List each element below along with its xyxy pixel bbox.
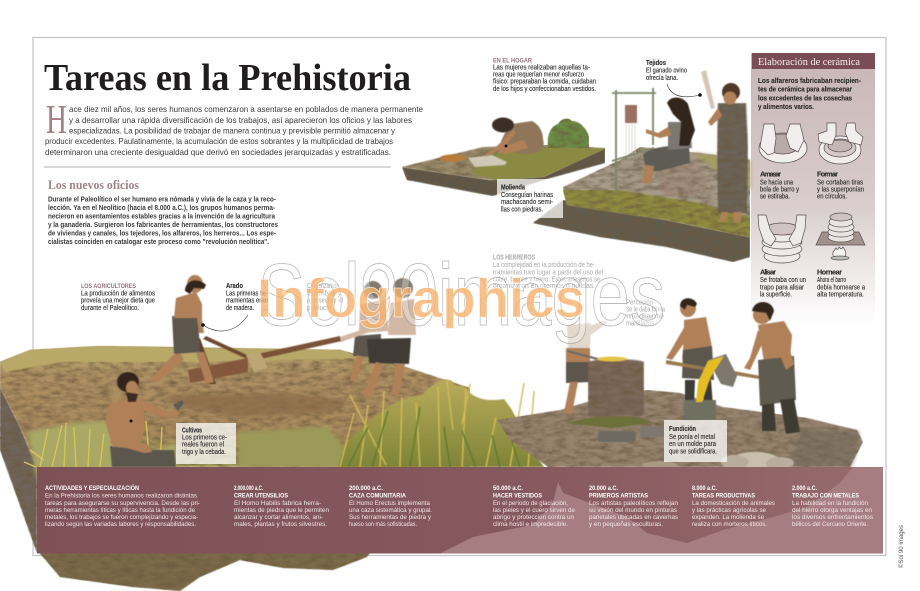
loom	[612, 88, 656, 193]
smith with tongs	[744, 302, 800, 434]
timeline column: tareas productivas: expanden. La molienda se	[692, 514, 764, 521]
step: alisar: Alisar	[760, 268, 776, 276]
watermark: infographics: Infographics	[257, 267, 585, 329]
callout: tejidos	[646, 58, 687, 82]
illustration: plowman and plow	[150, 275, 342, 384]
timeline column: tareas productivas: y las prácticas agrícolas se	[692, 507, 766, 514]
callout: cultivos: reales fueron el	[182, 440, 224, 448]
heading: los nuevos oficios: Los nuevos oficios	[48, 177, 139, 192]
intro paragraph: producir excedentes. Paulatinamente, la acumulación de estos sobrantes y la multiplicidad de trabajos	[45, 136, 393, 146]
step: hornear: Hornear	[817, 268, 842, 276]
callout: en el hogar: Las mujeres realizaban aquellas ta-	[493, 62, 591, 72]
timeline column: tareas productivas: La domesticación de animales	[692, 500, 776, 507]
horizon grass	[0, 346, 365, 372]
step: amasar	[760, 170, 799, 200]
timeline column: caza comunitaria	[349, 485, 432, 528]
step: alisar	[760, 268, 806, 298]
callout: arado: Las primeras he-	[226, 288, 268, 298]
callout: en el hogar	[493, 58, 596, 93]
callout: comercio faded: producto.	[307, 303, 333, 312]
drop cap: H	[46, 96, 67, 142]
timeline column: primeros artistas: y en pequeñas esculturas.	[589, 521, 663, 528]
callout: percusion faded	[626, 298, 665, 328]
flat stones	[598, 427, 664, 442]
timeline column: caza comunitaria: Sus herramientas de piedra y	[349, 514, 432, 521]
rock side	[0, 387, 37, 553]
step: amasar: bola de barro y	[760, 184, 799, 194]
callout: percusion faded: Se le daba forma	[626, 304, 665, 314]
wheat foreground	[338, 380, 544, 467]
callout: los agricultores: La producción de alimentos	[81, 288, 155, 298]
timeline column: trabajo con metales: 2.000 a.C.	[792, 485, 817, 492]
callout: tejidos: ofrecía lana.	[646, 73, 678, 82]
timeline column: hacer vestidos: En el período de glaciación,	[493, 500, 568, 507]
timeline column: primeros artistas	[589, 485, 679, 528]
soft white wash over blacksmith text zone	[490, 245, 610, 320]
weaver	[642, 97, 707, 196]
timeline column: crear utensilios: males, plantas y frutos silvestres.	[234, 521, 327, 528]
illustration: land	[0, 346, 863, 591]
icon: alisar	[758, 215, 806, 263]
step: hornear	[817, 268, 865, 298]
callout: fundicion: Fundición	[669, 424, 696, 433]
callout: en el hogar: EN EL HOGAR	[493, 58, 532, 64]
timeline column: actividades	[45, 483, 200, 528]
callout: cultivos: Los primeros ce-	[182, 432, 228, 442]
woman grinding	[484, 118, 544, 156]
step: amasar: Se hacía una	[760, 178, 793, 186]
timeline column: hacer vestidos: las pieles y el cuero sirven de	[493, 507, 575, 514]
step: formar: en círculos.	[817, 192, 847, 200]
callout: comercio faded: Comenzamos	[307, 281, 339, 290]
callout: los agricultores: LOS AGRICULTORES	[81, 283, 136, 290]
timeline column: tareas productivas: 8.000 a.C.	[692, 485, 717, 492]
timeline column: trabajo con metales: TRABAJO CON METALES	[792, 492, 859, 500]
callout: fundicion: que se solidificara.	[669, 446, 717, 456]
timeline column: crear utensilios: alcanzar y cortar alimentos, ani-	[234, 514, 323, 521]
right ground	[497, 390, 863, 467]
callout: los herreros: LOS HERREROS	[493, 252, 535, 262]
icon: amasar	[759, 124, 807, 163]
intro paragraph	[45, 96, 423, 157]
olive patch	[238, 426, 358, 467]
arrow: tejidos leader	[667, 84, 702, 97]
timeline column: crear utensilios	[234, 485, 329, 528]
standing woman with distaff	[701, 70, 748, 223]
timeline column: hacer vestidos	[493, 485, 575, 528]
timeline column: trabajo con metales: bélicos del Cercano Oriente.	[792, 521, 868, 528]
timeline column: tareas productivas	[692, 485, 776, 528]
crucible and molten metal	[666, 354, 772, 402]
callout: los herreros: organizaron en gremios o guildas.	[493, 281, 595, 290]
island rock and top surface	[402, 148, 605, 196]
watermark: sol90images: Sol90images	[258, 245, 665, 344]
callout: los agricultores	[81, 283, 155, 312]
ceramica intro: tes de cerámica para almacenar	[758, 84, 852, 94]
timeline column: primeros artistas: su visión del mundo en pinturas	[589, 507, 678, 514]
intro paragraph: determinaron una creciente desigualdad que derivó en sociedades jerarquizadas y estratificadas.	[45, 147, 391, 157]
illustration: tejidos island	[533, 70, 750, 262]
icon: hornear	[816, 213, 865, 260]
timeline column: caza comunitaria: una caza sistemática y grupal.	[349, 507, 432, 514]
timeline column: actividades: tareas para asegurarse su supervivencia. Desde las pri-	[45, 500, 200, 507]
timeline column: primeros artistas: PRIMEROS ARTISTAS	[589, 492, 648, 500]
field terrain	[0, 346, 470, 467]
band: timeline	[37, 467, 883, 554]
callout: percusion faded: Percusión	[626, 298, 653, 306]
callout: comercio faded	[307, 281, 343, 312]
callout: los agricultores: proveía una mejor dieta que	[81, 296, 155, 304]
timeline column: caza comunitaria: El Homo Erectus implementa	[349, 500, 430, 507]
title: Tareas en la Prehistoria	[44, 57, 411, 99]
text block: los nuevos oficios: de viviendas y canales, los tejedores, los alfareros, los herreros... Los espe-	[48, 228, 276, 237]
callout: comercio faded: a sembrar y	[307, 288, 341, 298]
text block: los nuevos oficios: y la ganadería. Surgieron los fabricantes de herramientas, los constructores	[48, 220, 278, 229]
timeline column: crear utensilios: CREAR UTENSILIOS	[234, 492, 288, 500]
credit: ©Sol 90 Images	[897, 524, 905, 568]
rock base below band	[37, 550, 372, 591]
step: hornear: Ahora el barro	[817, 275, 846, 284]
white rocks	[642, 452, 794, 469]
timeline column: actividades: lizando según las variadas labores y responsabilidades.	[45, 521, 196, 528]
text block: los nuevos oficios: cialistas coinciden en catalogar este proceso como "revolución neolítica".	[48, 237, 269, 246]
timeline column: crear utensilios: mientas de piedra que le permiten	[234, 507, 329, 514]
plant	[548, 119, 589, 148]
ceramica intro	[758, 76, 862, 111]
marker: cultivos	[130, 420, 132, 422]
timeline column: trabajo con metales: los diversos enfrentamientos	[792, 514, 874, 521]
step: formar: Se cortaban tiras	[817, 178, 863, 186]
timeline column: primeros artistas: parietales ubicadas en cavernas	[589, 514, 679, 521]
timeline column: actividades: ACTIVIDADES Y ESPECIALIZACIÓN	[45, 483, 139, 492]
timeline column: hacer vestidos: HACER VESTIDOS	[493, 492, 542, 500]
smith at anvil	[564, 320, 607, 414]
callout: fundicion: en un molde para	[669, 439, 716, 448]
illustration: smiths	[564, 298, 800, 434]
timeline column: primeros artistas: Los artistas paleolíticos reflejan	[589, 500, 678, 507]
marker: molienda	[504, 144, 508, 148]
callout: en el hogar: reas que requerían menor esfuerzo	[493, 70, 584, 78]
callout: arado: de madera.	[226, 303, 254, 312]
callout: fundicion	[664, 420, 727, 462]
callout: los herreros: La complejidad en la producción de he-	[493, 260, 595, 269]
illustration: reaper	[105, 372, 184, 467]
left wheat	[28, 421, 178, 477]
text block: los nuevos oficios: lección. Ya en el Neolítico (hacia el 8.000 a.C.), los grupos humanos perma-	[48, 203, 275, 212]
text block: los nuevos oficios	[48, 194, 278, 246]
timeline column: caza comunitaria: CAZA COMUNITARIA	[349, 492, 406, 500]
callout: en el hogar: físico: preparaban la comida, cuidaban	[493, 76, 596, 86]
ceramica intro: y alimentos varios.	[758, 102, 814, 111]
callout: los herreros	[493, 252, 603, 290]
panel: ceramica	[751, 53, 875, 325]
timeline column: caza comunitaria: 200.000 a.C.	[349, 485, 383, 492]
step: formar	[817, 170, 864, 200]
grass patch	[565, 415, 652, 428]
ceramica intro: los excedentes de las cosechas	[758, 94, 852, 102]
step: hornear: alta temperatura.	[817, 290, 864, 298]
step: alisar: la superficie.	[760, 290, 792, 298]
timeline column: tareas productivas: TAREAS PRODUCTIVAS	[692, 492, 755, 500]
pouring smith	[666, 298, 714, 408]
illustration: hogar island	[402, 118, 605, 196]
ceramica intro: Los alfareros fabricaban recipien-	[758, 76, 862, 85]
callout: percusion faded: martillazos.	[626, 318, 656, 328]
timeline column: trabajo con metales: La habilidad en la fundición	[792, 500, 868, 507]
timeline column: tareas productivas: realiza con morteros líticos.	[692, 521, 767, 528]
text block: los nuevos oficios: Durante el Paleolítico el ser humano era nómada y vivía de la caza y la reco-	[48, 194, 276, 204]
callout: los herreros: cobre, bronce y hierro. Estos artesanos se	[493, 274, 600, 284]
callout: arado	[226, 281, 268, 312]
arrow: arado leader	[201, 315, 248, 331]
callout: cultivos: Cultivos	[182, 426, 202, 434]
callout: tejidos: Tejidos	[646, 58, 666, 67]
intro paragraph: y a desarrollar una rápida diversificación de los trabajos, así aparecieron los oficios y las labores	[69, 115, 412, 125]
step: amasar: Amasar	[760, 170, 781, 178]
bowl and grinding plate	[440, 154, 507, 167]
step: formar: y las superponían	[817, 184, 864, 194]
timeline column: hacer vestidos: abrigo y protección contra un	[493, 514, 574, 521]
dark furrows	[165, 393, 350, 417]
callout: comercio faded: a cosechar el	[307, 296, 343, 304]
callout: cultivos: trigo y la cebada.	[182, 447, 226, 456]
callout: percusion faded: mediante	[626, 312, 664, 320]
stone anvil	[588, 359, 644, 417]
step: amasar: se estiraba.	[760, 192, 790, 200]
timeline column: trabajo con metales: del hierro otorga ventajas en	[792, 507, 872, 514]
timeline column: primeros artistas: 20.000 a.C.	[589, 485, 618, 492]
timeline column: hacer vestidos: 50.000 a.C.	[493, 485, 523, 492]
icon: formar	[818, 123, 863, 164]
timeline column: actividades: En la Prehistoria los seres humanos realizaron distintas	[45, 492, 198, 500]
mold	[684, 400, 716, 420]
callout: arado: rramientas eran	[226, 296, 268, 304]
intro paragraph: ace diez mil años, los seres humanos comenzaron a asentarse en poblados de manera permanente	[69, 104, 423, 114]
callout: los agricultores: durante el Paleolítico.	[81, 303, 139, 312]
step: alisar: trapo para alisar	[760, 282, 805, 292]
timeline column: trabajo con metales	[792, 485, 874, 528]
timeline column: actividades: meras herramientas líticas y líticas hasta la fundición de	[45, 507, 195, 514]
illustration: two pullers	[340, 278, 416, 398]
timeline column: caza comunitaria: hueso son más sofisticadas.	[349, 521, 417, 528]
step: formar: Formar	[817, 170, 838, 178]
callout: molienda: machacando semi-	[501, 197, 554, 206]
timeline column: hacer vestidos: clima hostil e impredecible.	[493, 521, 568, 528]
callout: tejidos: El ganado ovino	[646, 66, 687, 74]
ceramica heading: Elaboración de cerámica	[758, 56, 860, 68]
timeline column: actividades: metales, los trabajos se fueron complejizando y especia-	[45, 514, 198, 521]
callout: en el hogar: de los hijos y confeccionaban vestidos.	[493, 84, 596, 93]
ceramica heading	[752, 53, 875, 69]
step: hornear: debía hornearse a	[817, 282, 865, 292]
callout: los herreros: rramientas tuvo lugar a partir del uso del	[493, 268, 603, 276]
text block: los nuevos oficios: necieron en asentamientos estables gracias a la invención de la agricultura	[48, 211, 276, 220]
timeline column: crear utensilios: El Homo Habilis fabrica herra-	[234, 500, 321, 507]
callout: molienda	[497, 179, 563, 218]
callout: arado: Arado	[226, 281, 243, 290]
callout: fundicion: Se ponía el metal	[669, 432, 715, 441]
callout: molienda: Conseguían harinas	[501, 190, 553, 199]
land under band	[37, 467, 853, 554]
callout: molienda: llas con piedras.	[501, 204, 543, 214]
intro paragraph: especializadas. La posibilidad de trabajar de manera continua y previsible permitió almacenar y	[69, 126, 396, 136]
callout: cultivos	[176, 423, 236, 464]
timeline column: crear utensilios: 2.000.000 a.C.	[234, 485, 263, 492]
callout: molienda: Molienda	[501, 182, 526, 192]
step: alisar: Se frotaba con un	[760, 275, 806, 284]
